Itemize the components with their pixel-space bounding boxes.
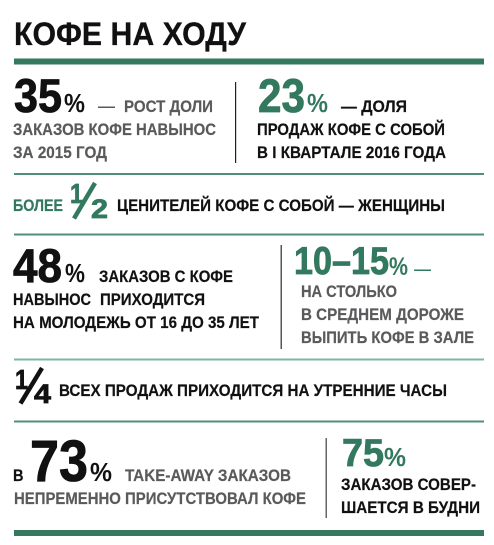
panel: 73% take-away	[13, 429, 306, 508]
panel: 35% growth: ЗАКАЗОВ КОФЕ НАВЫНОС	[13, 120, 216, 139]
panel: 35% growth	[13, 69, 216, 162]
panel: 73% take-away: НЕПРЕМЕННО ПРИСУТСТВОВАЛ КОФЕ	[14, 489, 306, 508]
panel: 73% take-away: %	[90, 457, 112, 487]
title: КОФЕ НА ХОДУ	[14, 16, 247, 52]
panel: one half women: БОЛЕЕ	[13, 196, 63, 215]
panel: one half women: ЦЕНИТЕЛЕЙ КОФЕ С СОБОЙ — ЖЕНЩИНЫ	[117, 196, 445, 215]
panel: 73% take-away: TAKE-AWAY ЗАКАЗОВ	[125, 466, 291, 485]
panel: 23% share: 23	[258, 69, 305, 122]
panel: 73% take-away: В	[13, 466, 24, 485]
panel: one quarter morning: 4	[34, 379, 51, 409]
panel: 23% share: ПРОДАЖ КОФЕ С СОБОЙ	[257, 120, 445, 139]
panel: 73% take-away: 73	[30, 429, 88, 494]
panel: 10-15% price: %	[389, 253, 408, 281]
panel: 48% youth: ЗАКАЗОВ С КОФЕ	[99, 267, 233, 286]
panel: 23% share	[257, 69, 446, 162]
panel: 10-15% price	[294, 240, 474, 347]
panel: 75% weekdays: ЗАКАЗОВ СОВЕР-	[341, 475, 476, 494]
panel: one half women: 2	[91, 194, 108, 224]
panel: 48% youth: НА МОЛОДЕЖЬ ОТ 16 ДО 35 ЛЕТ	[13, 313, 260, 332]
panel: one quarter morning: 1	[15, 364, 28, 395]
panel: 48% youth: НАВЫНОС	[13, 290, 91, 309]
panel: 23% share: %	[307, 88, 328, 118]
panel: one quarter morning	[15, 364, 447, 409]
panel: 75% weekdays: 75	[342, 432, 384, 475]
panel: one half women	[13, 178, 445, 224]
panel: one quarter morning: ВСЕХ ПРОДАЖ ПРИХОДИТСЯ НА УТРЕННИЕ ЧАСЫ	[59, 381, 447, 400]
panel: 23% share: — ДОЛЯ	[341, 97, 407, 116]
panel: 75% weekdays: ШАЕТСЯ В БУДНИ	[341, 498, 480, 517]
panel: 48% youth: ПРИХОДИТСЯ	[100, 290, 205, 309]
panel: 48% youth: 48	[13, 239, 62, 292]
panel: 10-15% price: НА СТОЛЬКО	[301, 282, 397, 301]
panel: 35% growth: ЗА 2015 ГОД	[13, 143, 107, 162]
panel: 75% weekdays: %	[384, 442, 406, 472]
panel: one half women: 1	[70, 178, 83, 209]
panel: 35% growth: %	[64, 88, 85, 118]
panel: 75% weekdays	[341, 432, 480, 517]
panel: 48% youth	[13, 239, 260, 332]
panel: 48% youth: %	[65, 258, 85, 288]
panel: 10-15% price: В СРЕДНЕМ ДОРОЖЕ	[301, 305, 464, 324]
panel: 35% growth: РОСТ ДОЛИ	[124, 97, 213, 116]
panel: 10-15% price: 10–15	[294, 240, 389, 283]
panel: 23% share: В I КВАРТАЛЕ 2016 ГОДА	[257, 143, 446, 162]
panel: 10-15% price: ВЫПИТЬ КОФЕ В ЗАЛЕ	[301, 328, 474, 347]
panel: 35% growth: 35	[14, 69, 62, 122]
